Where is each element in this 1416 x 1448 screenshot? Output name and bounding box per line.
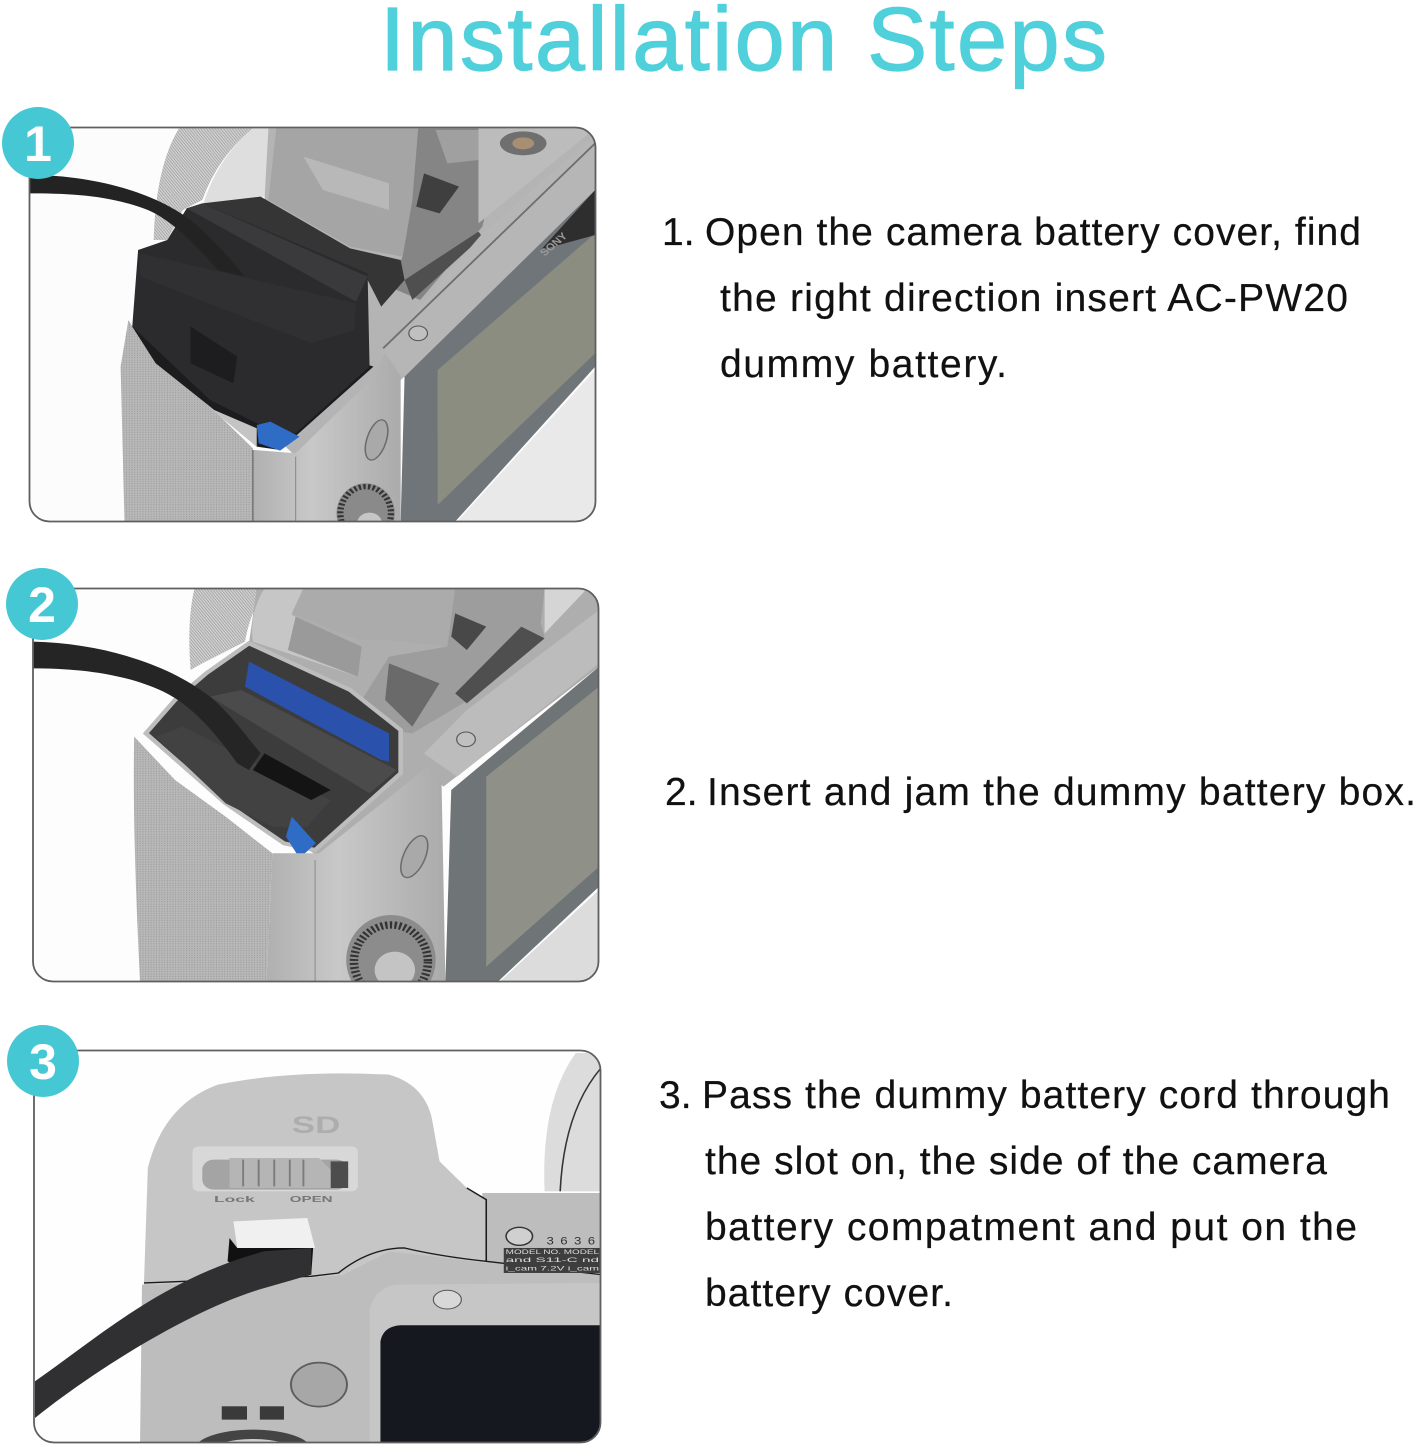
step 1 badge: 1 [24,116,52,172]
dial [346,915,436,1005]
blue latch [286,817,316,858]
lens ring [154,128,253,240]
screw top [506,1227,533,1245]
top plate [478,128,506,224]
lens ring [189,589,256,670]
dotted grip [121,320,253,522]
button [364,419,389,461]
seam [144,1248,601,1283]
step 3 instruction text: 3. [659,1074,692,1117]
panel border [33,588,598,982]
rating label [504,1248,601,1273]
camera top base [265,128,595,457]
slider labels: OPEN [290,1194,333,1204]
screw [457,732,475,747]
lens barrel [204,128,268,204]
corner [500,890,599,982]
SD text: SD [292,1111,340,1139]
rating label: i_cam 7.2V i_cam [506,1264,599,1272]
body diagonal [424,610,599,777]
step 1 instruction text: Open the camera battery cover, find [705,211,1361,254]
step 3 instruction text: battery cover. [705,1272,953,1315]
open door [292,591,302,614]
round button [291,1363,347,1407]
white corner [457,370,595,522]
step 3 badge [7,1025,79,1097]
dial [336,483,395,521]
white tab [233,1218,315,1248]
dial [195,1430,311,1448]
lower body [140,1251,601,1443]
slot opening [228,1238,313,1285]
panel: step 2 photo [6,568,599,1005]
body diagonal [404,235,482,376]
lens [544,1053,601,1191]
panel border [30,128,596,522]
frame screw [433,1290,461,1309]
slider plate [193,1146,358,1191]
button [395,833,433,880]
step 1 instruction text: the right direction insert AC-PW20 [720,277,1348,320]
right block [482,1193,601,1285]
rating label: MODEL NO. MODEL [506,1248,599,1256]
screen bezel [401,190,595,522]
step 3 badge: 3 [29,1034,57,1090]
step 2 badge: 2 [28,577,56,633]
step 3 instruction text: Pass the dummy battery cord through [702,1074,1390,1117]
screw [409,326,428,341]
step 1 instruction text [662,211,1361,386]
battery top [210,690,397,793]
contact strip [405,232,482,300]
number row: 3636 [547,1235,595,1247]
step 1 badge [2,107,74,179]
step 1 instruction text: dummy battery. [720,343,1007,386]
slider labels: Lock [214,1194,256,1204]
step 1 instruction text: 1. [662,211,695,254]
opened battery door [268,128,422,257]
screen [438,233,595,505]
dotted grip [134,737,272,982]
rating label: and S11-C nd [506,1256,599,1264]
panel border [34,1050,600,1442]
slider labels [214,1194,333,1204]
SONY logo: SONY [538,230,571,259]
panel: step 3 photo [7,1025,601,1448]
step 2 instruction text: Insert and jam the dummy battery box. [707,771,1416,814]
camera top base [249,588,599,857]
cable [29,175,245,277]
lens barrel [252,588,362,677]
mode icons [222,1406,247,1420]
hinge area [396,128,484,300]
contact label [455,627,545,703]
step 3 instruction text: battery compatment and put on the [705,1206,1357,1249]
step 2 badge [6,568,78,640]
screen [486,687,599,967]
battery blue edge [245,662,389,762]
silver plate by latch [210,408,257,447]
compartment [146,643,401,850]
step 3 instruction text [659,1074,1390,1315]
cable [35,1248,311,1418]
hinge [362,588,545,733]
step 2 instruction text: 2. [665,771,698,814]
screen frame [370,1283,601,1443]
grip door [144,1073,486,1285]
screen [380,1325,601,1443]
bezel [445,667,599,982]
top right plate [545,588,587,633]
blue latch [257,422,300,451]
compartment shadow [132,327,373,450]
cable [33,642,261,770]
battery [132,203,370,433]
opening below door [202,197,405,307]
step 3 instruction text: the slot on, the side of the camera [705,1140,1327,1183]
camera front [266,767,445,982]
panel: step 1 photo [2,107,596,543]
camera front [254,374,401,521]
